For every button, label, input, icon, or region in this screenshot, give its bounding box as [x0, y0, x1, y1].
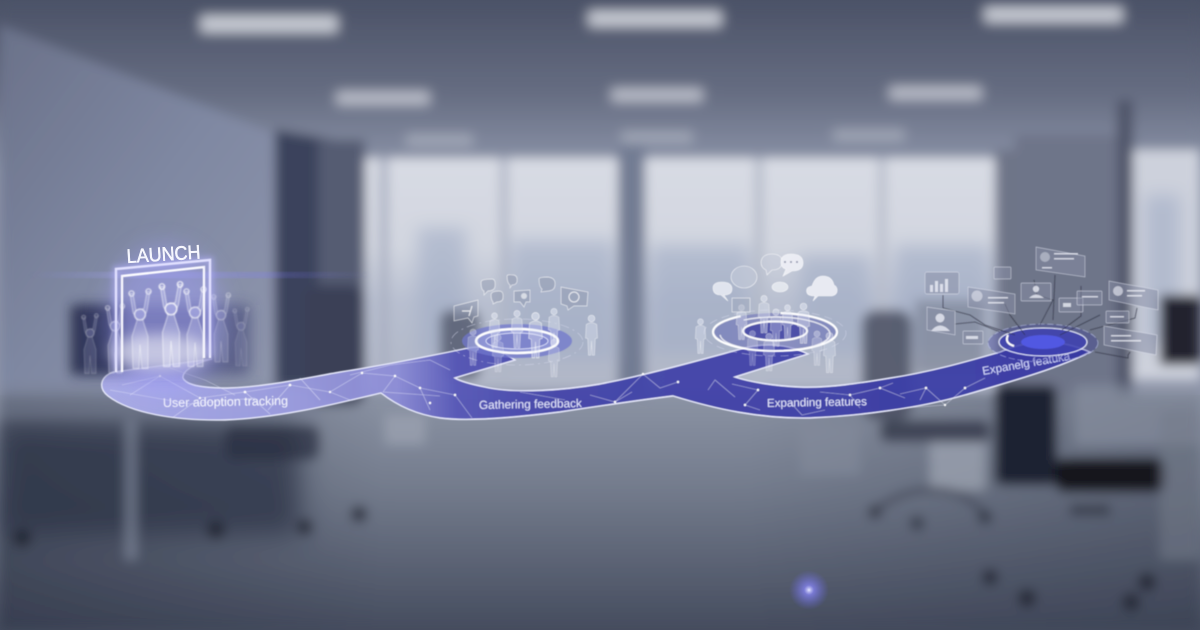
panel: bar chart	[925, 272, 959, 294]
panel: avatar	[1021, 283, 1051, 301]
label: gathering feedback: Gathering feedback	[479, 396, 582, 412]
hub 2: gathering feedback	[451, 275, 598, 377]
hub 4: expanding features data panels	[925, 247, 1158, 362]
ceiling	[0, 0, 1200, 170]
ring	[988, 324, 1098, 362]
left dark furniture	[0, 425, 300, 535]
bright floor patches	[385, 415, 425, 445]
floor	[0, 395, 1200, 630]
bubble icons	[569, 292, 579, 302]
left wall	[0, 25, 278, 400]
network lines on the ribbon	[110, 360, 985, 418]
chairs, desks and furniture	[0, 285, 1200, 611]
horizontal light beam	[30, 273, 370, 277]
launch gate	[30, 242, 370, 395]
panel: small left	[963, 331, 983, 344]
chat bubbles	[454, 275, 588, 323]
ring	[704, 310, 846, 356]
label: expanding features: Expanding features	[767, 395, 867, 410]
panel: right small	[1106, 311, 1129, 323]
label: expanding features on final stretch: Expanelg featuka	[981, 351, 1072, 378]
city skyline	[418, 195, 1180, 360]
panel content	[930, 252, 1145, 342]
label: user adoption tracking: User adoption tracking	[163, 394, 288, 410]
panel: mid card	[1059, 298, 1083, 312]
crowd	[82, 282, 249, 374]
floor light spot	[789, 570, 829, 610]
big right chair	[995, 385, 1057, 485]
panel: avatar left	[927, 307, 955, 335]
panel: right card	[1077, 291, 1102, 305]
panels	[925, 247, 1158, 355]
panel: profile with text	[968, 287, 1015, 314]
door frame	[116, 260, 210, 372]
LAUNCH title: LAUNCH	[126, 242, 201, 268]
panel: lower text	[1104, 326, 1157, 355]
wheels	[13, 505, 1156, 611]
panel: small card	[994, 267, 1011, 279]
gate glow	[107, 245, 223, 395]
connector lines	[943, 275, 1137, 358]
hub 3: expanding features	[695, 254, 846, 373]
dark halo behind crowd	[75, 305, 250, 375]
chat bubbles	[713, 254, 837, 312]
ceiling lights	[200, 6, 1123, 146]
ribbon path	[102, 342, 1090, 420]
people	[695, 319, 706, 354]
people	[468, 329, 478, 365]
ribbon segment shape	[102, 342, 1090, 420]
centre chair	[880, 420, 990, 442]
panel: top profile	[1036, 247, 1085, 277]
windows	[365, 158, 1015, 390]
ring	[451, 319, 583, 365]
left chair back	[225, 425, 320, 460]
panel: right profile	[1109, 281, 1158, 310]
